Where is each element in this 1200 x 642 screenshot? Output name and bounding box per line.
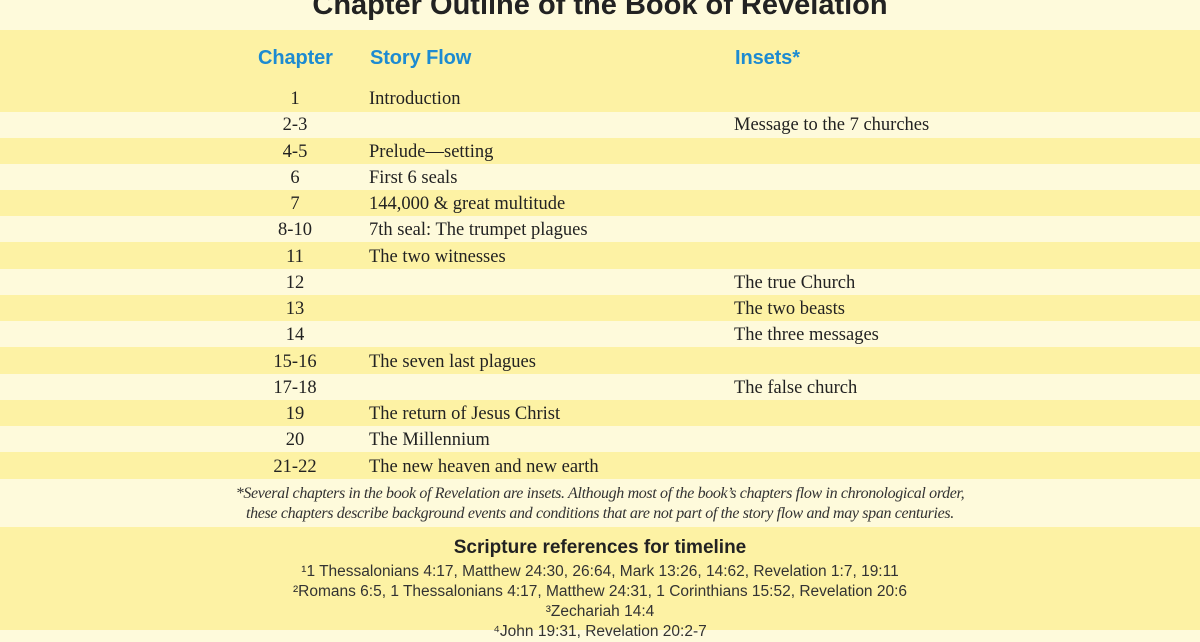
table rows: The two beasts (734, 299, 845, 319)
table rows: 14 (286, 325, 304, 345)
table rows: The new heaven and new earth (369, 457, 599, 477)
header: chapter: Chapter (258, 47, 333, 69)
header: story flow: Story Flow (370, 47, 471, 69)
table rows: The Millennium (369, 430, 490, 450)
table rows: 19 (286, 404, 304, 424)
table rows: First 6 seals (369, 168, 457, 188)
footnote (236, 485, 964, 522)
scripture references list: ³Zechariah 14:4 (546, 603, 654, 620)
table rows: 8-10 (278, 220, 312, 240)
scripture references list: ⁴John 19:31, Revelation 20:2-7 (493, 623, 707, 640)
table rows: 12 (286, 273, 304, 293)
table rows: 144,000 & great multitude (369, 194, 565, 214)
table rows: 13 (286, 299, 304, 319)
table rows: 4-5 (283, 142, 307, 162)
scripture references heading: Scripture references for timeline (454, 537, 746, 558)
table rows: 21-22 (273, 457, 317, 477)
table rows: 15-16 (273, 352, 317, 372)
table rows: The return of Jesus Christ (369, 404, 560, 424)
table rows: 20 (286, 430, 304, 450)
table rows: Message to the 7 churches (734, 115, 929, 135)
scripture references list: ²Romans 6:5, 1 Thessalonians 4:17, Matthew 24:31, 1 Corinthians 15:52, Revelation 20:6 (293, 583, 907, 600)
table rows: 7 (290, 194, 300, 214)
scripture references list (293, 563, 907, 640)
table rows: 6 (290, 168, 300, 188)
table rows: 1 (290, 89, 300, 109)
table rows: The true Church (734, 273, 855, 293)
table rows: 7th seal: The trumpet plagues (369, 220, 588, 240)
table rows: The false church (734, 378, 857, 398)
table rows: Prelude—setting (369, 142, 493, 162)
table rows: 11 (286, 247, 304, 267)
table rows (273, 89, 929, 477)
footnote: these chapters describe background events and conditions that are not part of the story flow and may span centuries. (246, 505, 954, 522)
table rows: Introduction (369, 89, 460, 109)
header: insets: Insets* (735, 47, 800, 69)
footnote: *Several chapters in the book of Revelation are insets. Although most of the book’s chapters flow in chronological order, (236, 485, 964, 502)
table rows: 17-18 (273, 378, 317, 398)
scripture references list: ¹1 Thessalonians 4:17, Matthew 24:30, 26:64, Mark 13:26, 14:62, Revelation 1:7, 19:11 (301, 563, 899, 580)
table rows: 2-3 (283, 115, 307, 135)
table rows: The seven last plagues (369, 352, 536, 372)
table rows: The two witnesses (369, 247, 506, 267)
table rows: The three messages (734, 325, 879, 345)
